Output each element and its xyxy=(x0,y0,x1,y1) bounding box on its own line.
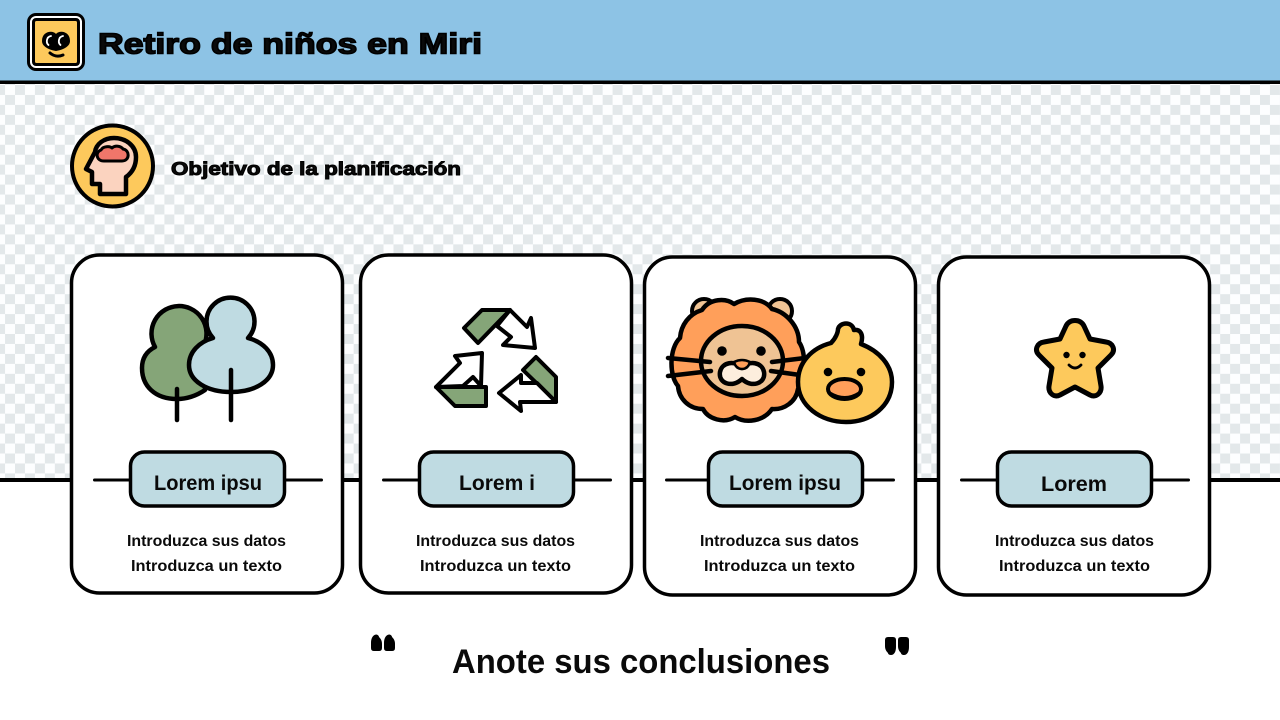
card text: Introduzca un texto xyxy=(420,558,571,575)
card text: Introduzca un texto xyxy=(704,558,855,575)
icon: closing quote xyxy=(885,637,909,655)
card text: Introduzca sus datos xyxy=(416,533,575,550)
header band xyxy=(0,0,1280,84)
card text xyxy=(700,533,859,575)
icon: trees xyxy=(142,298,273,420)
panel: card 1 xyxy=(72,255,342,593)
panel: card 2 xyxy=(360,255,632,593)
card text: Introduzca sus datos xyxy=(995,533,1154,550)
card text: Introduzca un texto xyxy=(999,558,1150,575)
icon: head with brain xyxy=(72,126,153,206)
label pill xyxy=(708,452,862,506)
label pill: Lorem xyxy=(1041,473,1107,496)
label pill xyxy=(998,452,1152,506)
conclusion text: Anote sus conclusiones xyxy=(452,643,830,681)
checkered background xyxy=(0,84,1280,479)
section heading: Objetivo de la planificación xyxy=(171,158,461,179)
card text xyxy=(127,533,286,575)
label pill xyxy=(130,452,284,506)
icon: lion xyxy=(668,299,805,421)
icon: recycling arrows xyxy=(436,310,556,411)
icon: opening quote xyxy=(371,634,395,651)
baseline rule xyxy=(0,478,1280,482)
label pill xyxy=(420,452,574,506)
card text: Introduzca sus datos xyxy=(700,533,859,550)
card text xyxy=(416,533,575,575)
panel: card 4 xyxy=(938,257,1210,595)
icon: star xyxy=(1037,320,1113,396)
label pill: Lorem ipsu xyxy=(729,472,841,495)
card text xyxy=(995,533,1154,575)
title: Retiro de niños en Miri xyxy=(98,28,482,60)
card text: Introduzca sus datos xyxy=(127,533,286,550)
icon: chick xyxy=(798,324,892,422)
card text: Introduzca un texto xyxy=(131,558,282,575)
icon: logo face xyxy=(27,13,85,71)
panel: card 3 xyxy=(644,257,916,595)
label pill: Lorem i xyxy=(459,472,535,495)
label pill: Lorem ipsu xyxy=(154,472,262,495)
